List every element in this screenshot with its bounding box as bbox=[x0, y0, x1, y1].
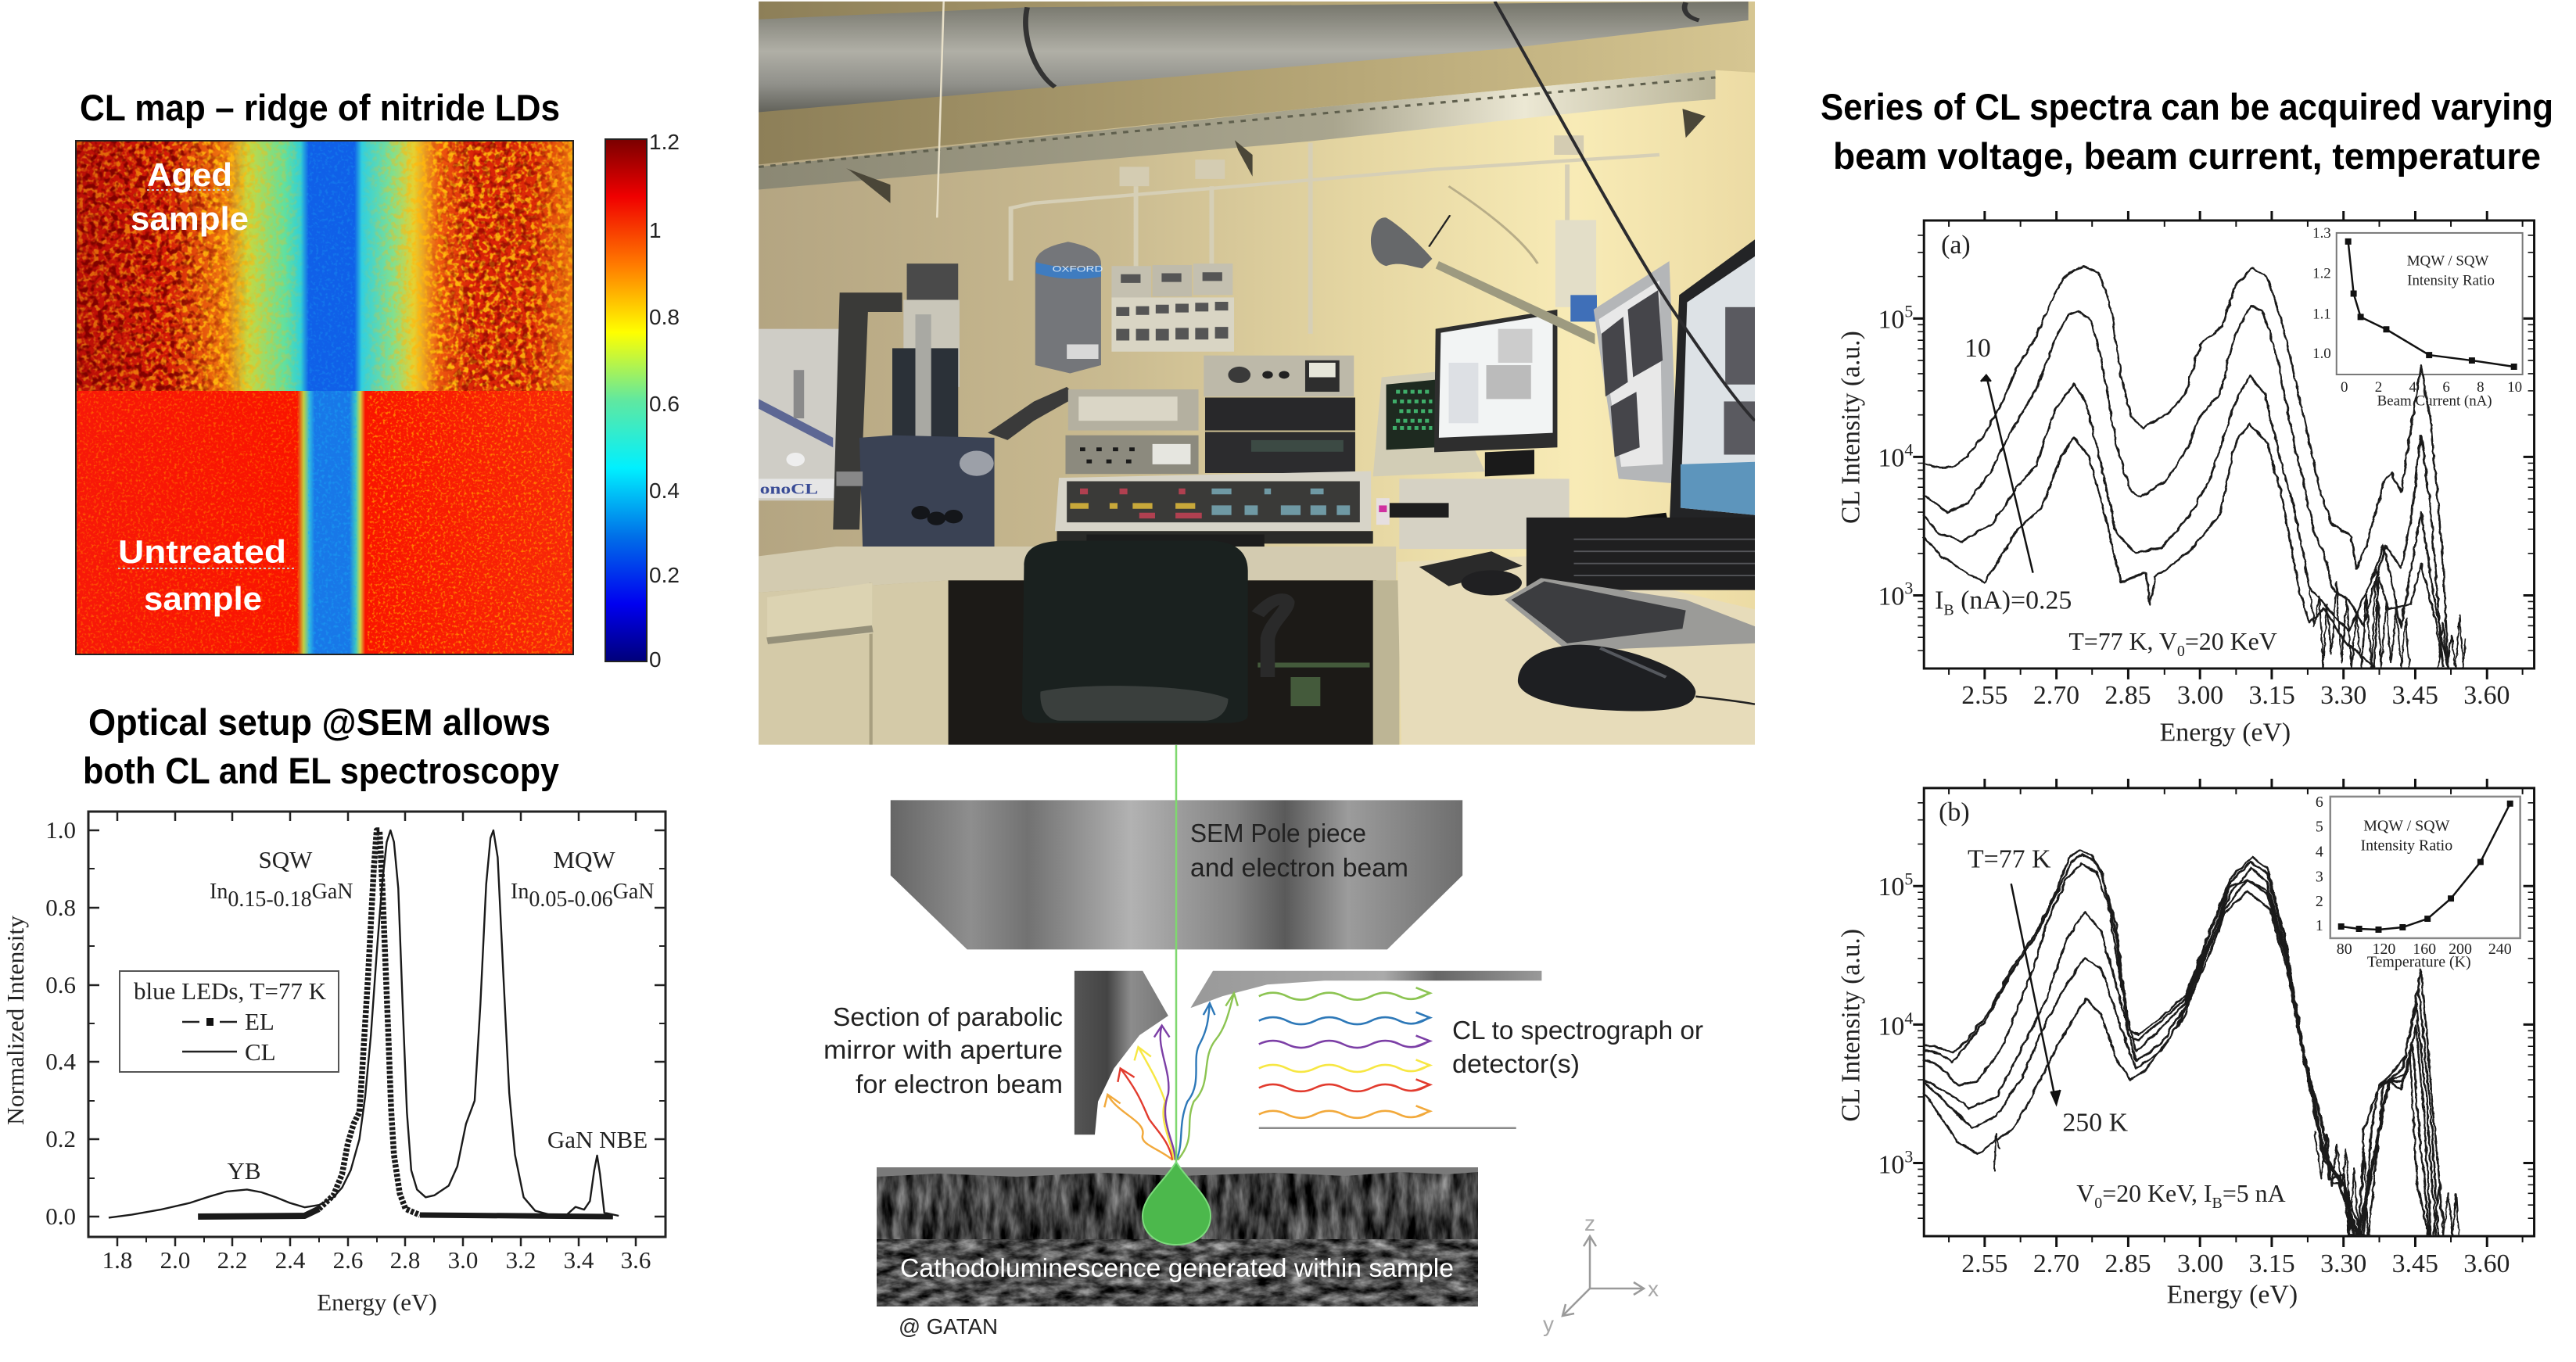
chart: normalized CL and EL spectra: 0.6 bbox=[45, 971, 76, 998]
axis labels b: 10 bbox=[1878, 1150, 1904, 1179]
legend bbox=[120, 971, 339, 1072]
liquid nitrogen dewar bbox=[988, 242, 1103, 440]
SEM pole piece bbox=[891, 800, 1462, 949]
chart: normalized CL and EL spectra: GaN bbox=[613, 880, 655, 904]
axis labels a: 10 bbox=[1878, 443, 1904, 472]
axis labels a: 10 bbox=[1878, 305, 1904, 334]
axis labels b: 3.45 bbox=[2392, 1249, 2438, 1278]
axis labels b: 10 bbox=[1878, 1012, 1904, 1041]
inset b: intensity ratio vs temperature bbox=[2316, 794, 2520, 971]
axis labels b: 3.00 bbox=[2177, 1249, 2223, 1278]
axis labels a: 5 bbox=[1904, 301, 1913, 321]
chart labels: SQW bbox=[259, 846, 313, 873]
inset a: intensity ratio vs beam current: 1.2 bbox=[2312, 266, 2331, 282]
colour scale bar: 1 bbox=[649, 218, 662, 242]
side unit on desk bbox=[1376, 478, 1570, 549]
chart: normalized CL and EL spectra: 0.8 bbox=[45, 894, 76, 921]
axis labels a: 3.45 bbox=[2392, 681, 2438, 710]
title: optical setup bbox=[83, 701, 559, 791]
black box and keyboards bbox=[1419, 518, 1755, 651]
inset b: intensity ratio vs temperature: 4 bbox=[2316, 843, 2323, 860]
colour scale bar: 0.2 bbox=[649, 563, 680, 587]
axis labels b: 2.85 bbox=[2104, 1249, 2151, 1278]
inset a: intensity ratio vs beam current: 1.3 bbox=[2312, 225, 2331, 242]
chart b: CL spectra vs temperature bbox=[1837, 779, 2535, 1310]
CL output waves bbox=[1259, 987, 1516, 1128]
axis labels b: 2.70 bbox=[2033, 1249, 2079, 1278]
inset a: intensity ratio vs beam current: 10 bbox=[2507, 379, 2522, 396]
title: CL map: CL map – ridge of nitride LDs bbox=[80, 87, 560, 128]
cable tray bbox=[759, 70, 1716, 203]
inset a: intensity ratio vs beam current: 1.1 bbox=[2312, 306, 2331, 322]
label: CL to spectrograph bbox=[1452, 1016, 1703, 1078]
colour scale bar bbox=[605, 130, 680, 672]
inset b: intensity ratio vs temperature: 160 bbox=[2413, 941, 2436, 958]
axis labels b: (b) bbox=[1939, 798, 1970, 827]
parabolic mirror section bbox=[1075, 971, 1541, 1134]
chart labels: Energy (eV) bbox=[317, 1289, 437, 1316]
map label: untreated sample bbox=[118, 533, 286, 617]
desk surfaces bbox=[759, 547, 1755, 745]
legend: EL bbox=[245, 1008, 274, 1035]
chart: normalized CL and EL spectra: In bbox=[511, 880, 529, 904]
axis labels a: (a) bbox=[1941, 231, 1971, 260]
label: parabolic mirror: Section of parabolic bbox=[833, 1002, 1063, 1031]
left cabinet with logo: onoCL bbox=[760, 481, 818, 497]
axis labels a: 3.30 bbox=[2320, 681, 2366, 710]
CL map heatmap bbox=[76, 141, 573, 654]
map label: aged sample: sample bbox=[131, 200, 249, 237]
chart: normalized CL and EL spectra: 0.2 bbox=[45, 1125, 76, 1152]
colour scale bar: 1.2 bbox=[649, 130, 680, 154]
electron beam bbox=[1175, 745, 1177, 1162]
title: series of CL spectra: beam voltage, beam current, temperature bbox=[1833, 135, 2541, 177]
label: sample caption: Cathodoluminescence generated within sample bbox=[900, 1253, 1454, 1282]
chart labels: YB bbox=[227, 1157, 261, 1185]
inset a: intensity ratio vs beam current: Beam Current (nA) bbox=[2377, 393, 2492, 410]
label: CL to spectrograph: detector(s) bbox=[1452, 1049, 1580, 1078]
inset b: intensity ratio vs temperature: Intensity Ratio bbox=[2360, 837, 2452, 855]
ventilation duct bbox=[759, 2, 1749, 113]
chart labels: 2.6 bbox=[333, 1246, 363, 1274]
chair bbox=[1022, 541, 1287, 723]
legend: blue LEDs, T=77 K bbox=[134, 977, 327, 1005]
map label: aged sample: Aged bbox=[147, 156, 232, 193]
diagram: CL collection optics bbox=[823, 745, 1703, 1339]
chart labels: 3.0 bbox=[448, 1246, 478, 1274]
right monitors bbox=[1594, 239, 1755, 537]
wall outlet bbox=[1555, 220, 1597, 321]
coordinate axes: x bbox=[1648, 1277, 1659, 1301]
inset a: intensity ratio vs beam current: Intensity Ratio bbox=[2407, 273, 2495, 289]
axis labels a: 2.55 bbox=[1961, 681, 2007, 710]
axis labels a: 3.00 bbox=[2177, 681, 2223, 710]
label: SEM pole piece bbox=[1190, 819, 1408, 882]
chart labels: GaN NBE bbox=[547, 1126, 648, 1153]
wall sockets bbox=[1111, 263, 1234, 352]
SEM column bbox=[833, 263, 995, 547]
chart labels: 2.4 bbox=[275, 1246, 306, 1274]
chart: normalized CL and EL spectra: 0.0 bbox=[45, 1203, 76, 1230]
inset b: intensity ratio vs temperature: 1 bbox=[2316, 917, 2323, 934]
chart labels: 2.0 bbox=[160, 1246, 190, 1274]
inset b: intensity ratio vs temperature: 2 bbox=[2316, 893, 2323, 910]
sample cross-section bbox=[877, 1167, 1478, 1306]
axis labels a: 4 bbox=[1904, 439, 1913, 459]
chart labels: 1.8 bbox=[102, 1246, 132, 1274]
computer mouse bbox=[1518, 645, 1755, 711]
arrow a: increasing current bbox=[1981, 375, 2033, 573]
inset b: intensity ratio vs temperature: 5 bbox=[2316, 819, 2323, 836]
inset b: intensity ratio vs temperature: 6 bbox=[2316, 794, 2323, 811]
chart labels: 2.2 bbox=[217, 1246, 247, 1274]
axis labels b: V bbox=[2076, 1180, 2094, 1207]
chart a: CL spectra vs beam current bbox=[1837, 211, 2535, 747]
inset a: intensity ratio vs beam current: 8 bbox=[2477, 379, 2485, 396]
axis labels a: T=77 K, V bbox=[2068, 628, 2177, 655]
axis labels a: Energy (eV) bbox=[2160, 719, 2291, 747]
hanging wire bbox=[937, 2, 944, 217]
chart labels bbox=[2, 846, 651, 1316]
axis labels a: (nA)=0.25 bbox=[1954, 586, 2072, 615]
axis labels b: Energy (eV) bbox=[2167, 1281, 2298, 1310]
axis labels b: 3 bbox=[1904, 1147, 1913, 1167]
axis labels b: 250 K bbox=[2062, 1109, 2129, 1138]
electronics rack bbox=[1065, 356, 1355, 474]
axis labels b: 10 bbox=[1878, 873, 1904, 901]
axis labels a: 10 bbox=[1964, 334, 1991, 363]
ceiling cable bbox=[1494, 2, 1755, 421]
interaction volume drop bbox=[1143, 1162, 1211, 1245]
credit: @ GATAN bbox=[899, 1314, 998, 1339]
map label: aged sample bbox=[131, 156, 249, 237]
coordinate axes: z bbox=[1584, 1211, 1595, 1235]
lamp bbox=[1371, 215, 1595, 344]
axis labels b: 3.15 bbox=[2249, 1249, 2295, 1278]
axis labels a: 3 bbox=[1904, 579, 1913, 598]
inset a: intensity ratio vs beam current: 0 bbox=[2341, 379, 2348, 396]
axis labels a bbox=[1837, 231, 2510, 747]
colour scale bar: 0.4 bbox=[649, 478, 680, 503]
axis labels a: CL Intensity (a.u.) bbox=[1837, 331, 1866, 524]
label: parabolic mirror bbox=[823, 1002, 1063, 1099]
chart: normalized CL and EL spectra: In bbox=[210, 880, 228, 904]
axis labels b: 4 bbox=[1904, 1008, 1913, 1027]
axis labels a: 2.85 bbox=[2104, 681, 2151, 710]
axis labels a: 3.15 bbox=[2249, 681, 2295, 710]
chart: normalized CL and EL spectra: GaN bbox=[312, 880, 353, 904]
axis labels a: =20 KeV bbox=[2185, 628, 2277, 655]
chart: normalized CL and EL spectra: 1.0 bbox=[45, 816, 76, 844]
CRT monitor bbox=[1373, 371, 1485, 476]
inset a: intensity ratio vs beam current: 1.0 bbox=[2312, 346, 2331, 362]
arrow b: increasing temperature bbox=[2011, 884, 2060, 1104]
inset b: intensity ratio vs temperature: 80 bbox=[2337, 941, 2352, 958]
inset a: intensity ratio vs beam current: 2 bbox=[2375, 379, 2382, 396]
axis labels b: 3.60 bbox=[2463, 1249, 2510, 1278]
spectra curves b bbox=[1924, 851, 2459, 1235]
axis labels a: 3.60 bbox=[2463, 681, 2510, 710]
colour scale bar: 0 bbox=[649, 647, 662, 672]
LCD monitor bbox=[1434, 310, 1557, 476]
title: optical setup: both CL and EL spectroscopy bbox=[83, 750, 559, 791]
electronics under desk bbox=[1258, 662, 1369, 706]
legend: CL bbox=[245, 1038, 276, 1066]
label: parabolic mirror: for electron beam bbox=[856, 1070, 1063, 1099]
axis labels b: 0 bbox=[2094, 1195, 2102, 1212]
axis labels a: I bbox=[1935, 586, 1943, 615]
axis labels b: 2.55 bbox=[1961, 1249, 2007, 1278]
chart: normalized CL and EL spectra: 0.05-0.06 bbox=[529, 887, 613, 912]
axis labels a: 10 bbox=[1878, 582, 1904, 611]
axis labels b: =5 nA bbox=[2223, 1180, 2286, 1207]
inset b: intensity ratio vs temperature: Temperature (K) bbox=[2367, 954, 2471, 971]
inset a: intensity ratio vs beam current: MQW / SQW bbox=[2407, 253, 2489, 270]
inset a: intensity ratio vs beam current: 4 bbox=[2409, 379, 2417, 396]
chart labels: 3.4 bbox=[564, 1246, 594, 1274]
label: SEM pole piece: SEM Pole piece bbox=[1190, 819, 1366, 848]
axis labels a: 2.70 bbox=[2033, 681, 2079, 710]
axis labels b: T=77 K bbox=[1968, 844, 2051, 873]
axis labels b: B bbox=[2212, 1195, 2223, 1212]
axis labels a: B bbox=[1943, 601, 1954, 618]
axis labels b: 5 bbox=[1904, 869, 1913, 888]
inset a: intensity ratio vs beam current bbox=[2312, 225, 2523, 410]
control console bbox=[1055, 471, 1373, 551]
chart labels: 3.2 bbox=[506, 1246, 536, 1274]
colour scale bar: 0.8 bbox=[649, 305, 680, 329]
inset b: intensity ratio vs temperature: MQW / SQW bbox=[2363, 818, 2450, 835]
inset b: intensity ratio vs temperature: 3 bbox=[2316, 868, 2323, 885]
label: CL to spectrograph: CL to spectrograph or bbox=[1452, 1016, 1703, 1045]
title: series of CL spectra bbox=[1821, 86, 2553, 177]
wall conduits bbox=[1011, 142, 1659, 334]
wavy CL rays inside mirror bbox=[1104, 993, 1238, 1160]
inset a: intensity ratio vs beam current: 6 bbox=[2442, 379, 2450, 396]
title: optical setup: Optical setup @SEM allows bbox=[88, 701, 551, 743]
axis labels b: =20 KeV, I bbox=[2102, 1180, 2212, 1207]
left cabinet with logo bbox=[759, 329, 839, 500]
curve: EL bbox=[198, 830, 613, 1217]
chart: normalized CL and EL spectra bbox=[2, 812, 666, 1316]
chart labels: 2.8 bbox=[390, 1246, 420, 1274]
inset b: intensity ratio vs temperature: 120 bbox=[2373, 941, 2395, 958]
inset b: intensity ratio vs temperature: 240 bbox=[2488, 941, 2512, 958]
map label: untreated sample: Untreated bbox=[118, 533, 286, 570]
map label: untreated sample: sample bbox=[144, 580, 262, 617]
chart labels: 3.6 bbox=[621, 1246, 651, 1274]
spectra curves a bbox=[1924, 267, 2466, 667]
chart labels: MQW bbox=[553, 846, 615, 873]
colour scale bar: 0.6 bbox=[649, 392, 680, 416]
inset b: intensity ratio vs temperature: 200 bbox=[2449, 941, 2472, 958]
axis labels b: 3.30 bbox=[2320, 1249, 2366, 1278]
liquid nitrogen dewar: OXFORD bbox=[1053, 264, 1103, 274]
label: parabolic mirror: mirror with aperture bbox=[823, 1035, 1063, 1064]
curve: CL bbox=[109, 830, 619, 1217]
axis labels b: CL Intensity (a.u.) bbox=[1837, 929, 1866, 1122]
axis labels b bbox=[1837, 798, 2510, 1310]
chart: normalized CL and EL spectra: 0.4 bbox=[45, 1048, 77, 1075]
coordinate axes bbox=[1543, 1211, 1659, 1336]
coordinate axes: y bbox=[1543, 1312, 1554, 1336]
photo: CL laboratory setup bbox=[759, 0, 1755, 745]
chart: normalized CL and EL spectra: 0.15-0.18 bbox=[228, 887, 312, 912]
chart labels: Normalized Intensity bbox=[2, 915, 29, 1125]
label: SEM pole piece: and electron beam bbox=[1190, 853, 1408, 882]
axis labels a: 0 bbox=[2177, 643, 2185, 660]
